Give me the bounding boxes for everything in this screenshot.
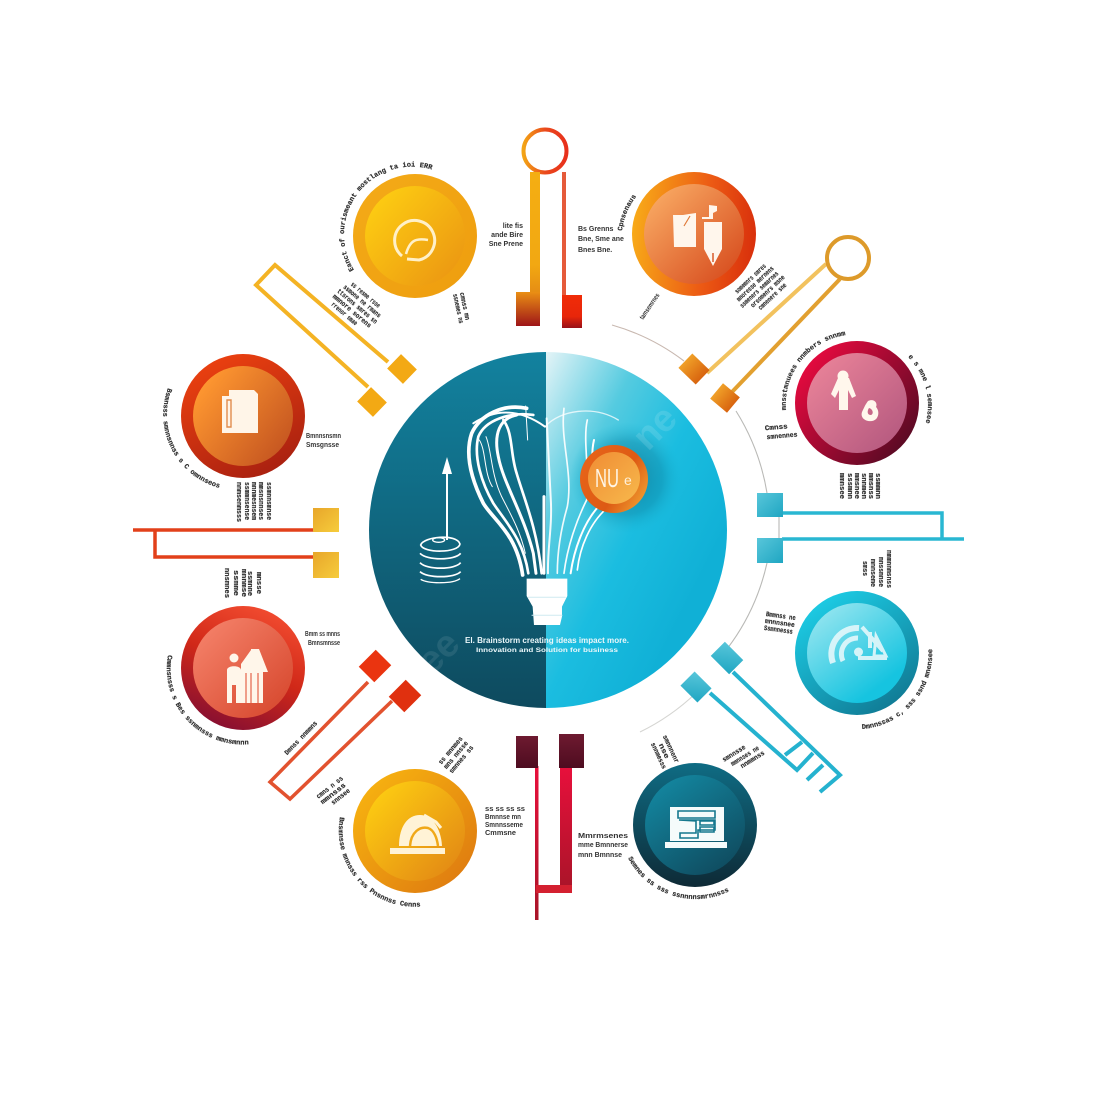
text block upper right: smnnes ss [448, 745, 476, 776]
text columns below [234, 482, 272, 522]
text block left [315, 775, 354, 812]
medallion halo [570, 422, 682, 534]
text block right: Bmnsmnsse [308, 640, 340, 647]
icon: upward arrow [442, 457, 452, 540]
arc label: Cpnsenaus [618, 195, 636, 230]
watermark: ee [409, 623, 468, 682]
text columns above: ssmnne [245, 571, 253, 596]
text columns below: mmsnss [866, 473, 874, 499]
text block far left: nnmmns [299, 720, 320, 741]
medallion: e [624, 472, 632, 488]
text columns above [860, 550, 892, 588]
text block left: mnn Bmnnse [578, 852, 622, 859]
text block right: ande Bire [491, 232, 523, 239]
text block left: Mmrmsenes [578, 833, 628, 840]
text block left: mnnnsnee [764, 618, 795, 630]
text block left: smnennes [766, 432, 798, 442]
text block lower right: mnoresse mernens [736, 265, 776, 304]
central caption [465, 635, 629, 654]
medallion glyphs: NU [595, 463, 619, 493]
text block right [305, 631, 340, 647]
icon: signal arcs [831, 627, 887, 663]
text columns below [837, 473, 881, 499]
text block upper left: smnnnenr [660, 734, 680, 765]
text block right [485, 806, 525, 837]
text block right: Bmnnse mn [485, 814, 521, 821]
text block left: mme Bmnnerse [578, 842, 628, 849]
text block right: Sne Prene [489, 241, 523, 248]
text block left: snnsee [330, 788, 352, 807]
arc label: Bsmnsss smnnsnnss s C omnnseos [163, 388, 220, 488]
text block right [489, 223, 523, 248]
text columns above: nmmnnmsnss [884, 550, 892, 588]
text block lower right: somemnrs smres [734, 263, 768, 296]
text block lower right [729, 259, 792, 321]
text line lower left: tamsemrnes [639, 292, 661, 321]
icon: two figures [227, 649, 268, 703]
text block left: Bmmnss ne [765, 611, 796, 623]
text block left: Ssmnnesss [763, 625, 793, 637]
text block upper right: smnnsse [721, 744, 748, 765]
icon: light bulb [469, 406, 618, 625]
text block lower right [450, 292, 471, 324]
text block upper right: mns nnsse [443, 740, 471, 771]
icon: gauge [395, 220, 435, 260]
text columns below: nnmsenmsss [234, 482, 242, 522]
text block upper left [647, 734, 680, 771]
text block lower left: rrenor smae [329, 301, 359, 328]
text block left [763, 611, 796, 637]
arc label left: mnsstmnuees nnmbers snnmmme [782, 332, 846, 410]
connector: lower right [680, 642, 840, 792]
text columns below: ssmmnn [873, 473, 881, 499]
icon: folder [222, 390, 258, 433]
text columns below: mmnsee [837, 473, 845, 499]
text block left [578, 226, 624, 254]
text block right: ss ss ss ss [485, 806, 525, 813]
text block far left [284, 720, 320, 757]
text block lower left: ss resme rsse [348, 281, 381, 310]
text columns below: mnnmesnsem [249, 482, 257, 520]
arc label: Cmmnsnsss s Bes ssnmnsss mmnsmnnn [166, 655, 248, 745]
connector: bottom [516, 734, 584, 920]
text block lower right: orsomenrs msne [750, 274, 787, 310]
text columns below: ssmnnsmnse [264, 482, 272, 520]
text columns above: mnsse [254, 572, 262, 594]
connector: right [757, 493, 964, 563]
text block right: Smsgnsse [306, 442, 339, 449]
ring [524, 130, 566, 172]
left half of central disc [369, 352, 546, 708]
thin orbit arcs [612, 325, 779, 732]
ring [827, 237, 869, 279]
text block upper right: mmnnses ne [730, 745, 761, 769]
text columns below: ssmmnsense [242, 482, 250, 520]
text block left [578, 833, 628, 859]
text block left [765, 423, 798, 442]
arc label: Eanct of ourismeant mostlang ta ioi ERRE [339, 161, 432, 272]
text columns above: smss [860, 561, 868, 576]
icon: person and blob [831, 370, 878, 421]
panel: dark teal node [578, 734, 767, 900]
connector: left [133, 508, 339, 578]
text block right: lite fis [503, 223, 523, 230]
text block lower right: ssnemes ns [450, 293, 464, 324]
text columns above: mnnmse [239, 569, 247, 597]
connector: upper right [678, 237, 869, 413]
text columns above: mnssmnse [876, 557, 884, 587]
panel: bottom yellow node [284, 720, 525, 907]
central caption: El. Brainstorm creating ideas impact more. [465, 635, 629, 645]
text block upper right: ss mnnmes [437, 736, 465, 767]
icon: document and pen [673, 205, 722, 266]
text block left: cmns n ss [315, 775, 345, 801]
watermark upper right: ne [625, 397, 686, 458]
panel: top-left yellow node [329, 161, 523, 330]
text block far left: Dmnss [284, 739, 302, 757]
text columns below: mmsnsnnses [256, 482, 264, 520]
panel: top-right orange node [578, 172, 789, 321]
text block left: Bs Grenns [578, 226, 614, 233]
text block lower right: cmnenere sne [757, 282, 789, 312]
text block right: Bmm ss mnns [305, 631, 340, 638]
text block upper left: nse [656, 742, 670, 760]
text block lower left [326, 277, 387, 337]
connector: upper left [256, 265, 417, 417]
text block left: Bne, Sme ane [578, 236, 624, 243]
text block right: Smnnsseme [485, 822, 523, 829]
arc label: Bnsmnsse mnnsss rss Pnsnnss Cenns [338, 817, 420, 907]
text block upper left: snnmesss [648, 742, 667, 771]
text block upper right: nnmmnss [739, 750, 767, 771]
text block upper right [721, 737, 767, 777]
text block upper right [437, 736, 476, 776]
arc label: Dmnnssas c, sss ssnd mnensee [862, 649, 932, 729]
panel: lower-left red node [166, 568, 340, 745]
text columns below: snnmen [859, 473, 867, 499]
text columns above: mnnseme [868, 559, 876, 587]
text block lower left: ssmone ne rmans [341, 284, 382, 320]
text block right: Cmmsne [485, 830, 516, 837]
medallion [580, 445, 648, 513]
icon: coin stack [420, 537, 461, 583]
icon: hard hat [390, 815, 445, 854]
right half of central disc [546, 352, 727, 708]
arc label right: e s mne l semnsee [908, 355, 932, 424]
text columns above [222, 568, 262, 598]
central panel [369, 352, 727, 708]
text columns below: sssmnn [845, 473, 853, 499]
text block left: Bnes Bne. [578, 247, 612, 254]
connector: top [516, 130, 582, 328]
text block right [306, 433, 341, 449]
connector: lower left [270, 650, 421, 799]
text block lower left: ttsrons smres sn [335, 288, 378, 326]
text block right: Bmnnsnsmn [306, 433, 341, 440]
central caption: Innovation and Solution for business [476, 647, 618, 654]
text block lower right: ssmeners semarnes [739, 270, 781, 310]
panel: cyan node [763, 550, 932, 729]
text columns below: mmsnee [852, 473, 860, 499]
text block lower left: mmnore sorens [330, 293, 372, 330]
text columns above: nnsmnes [222, 568, 230, 598]
text block left: mmnsss [320, 782, 348, 807]
icon: laptop [665, 807, 727, 848]
text columns above: ssmme [231, 570, 239, 596]
arc label: Semnes ss sss ssnnnnsmrnnsss [628, 856, 728, 900]
text block left: Cmnss [765, 423, 788, 433]
panel: crimson node [765, 332, 932, 499]
text block lower right: cmnss mn [457, 292, 471, 321]
panel: left orange node [163, 354, 341, 522]
